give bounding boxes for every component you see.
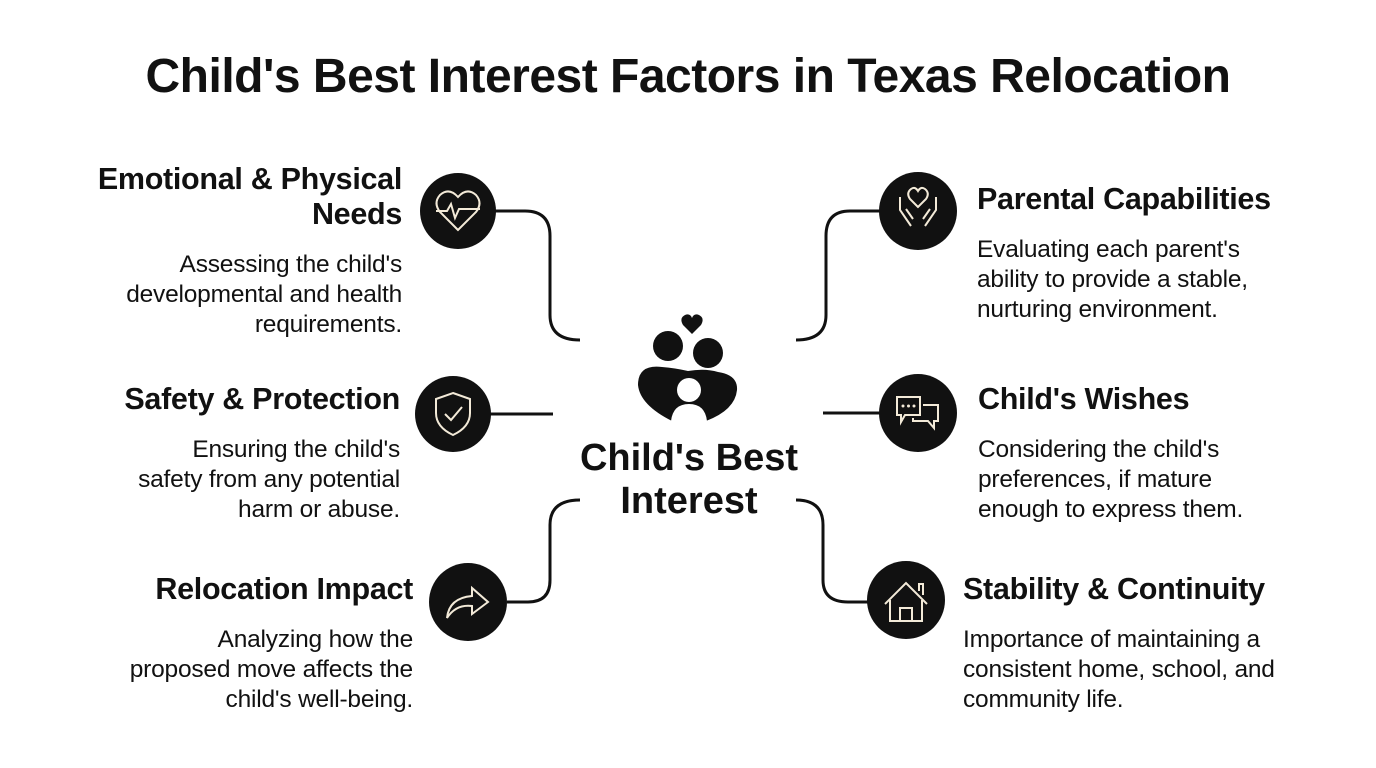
panel: emotional & physical needs: requirements. bbox=[255, 311, 402, 338]
panel: emotional & physical needs: Needs bbox=[312, 197, 402, 231]
panel: safety & protection bbox=[124, 382, 400, 523]
panel: emotional & physical needs: Assessing the child's bbox=[180, 251, 402, 278]
center label: Child's Best bbox=[580, 437, 798, 479]
panel: safety & protection: harm or abuse. bbox=[238, 496, 400, 523]
center label: Interest bbox=[620, 480, 758, 522]
panel: relocation impact: Relocation Impact bbox=[155, 572, 413, 606]
panel: child's wishes bbox=[978, 382, 1243, 523]
center label bbox=[580, 437, 798, 522]
panel: relocation impact: Analyzing how the bbox=[218, 626, 413, 653]
panel: parental capabilities bbox=[977, 182, 1271, 323]
panel: stability & continuity: Stability & Continuity bbox=[963, 572, 1265, 606]
panel: parental capabilities: Parental Capabilities bbox=[977, 182, 1271, 216]
panel: stability & continuity: consistent home, school, and bbox=[963, 656, 1275, 683]
panel: relocation impact: proposed move affects the bbox=[130, 656, 413, 683]
panel: child's wishes: preferences, if mature bbox=[978, 466, 1212, 493]
icon: chat bbox=[879, 374, 957, 452]
panel: emotional & physical needs: Emotional & Physical bbox=[98, 162, 402, 196]
panel: relocation impact bbox=[130, 572, 413, 713]
panel: stability & continuity bbox=[963, 572, 1275, 713]
panel: child's wishes: enough to express them. bbox=[978, 496, 1243, 523]
panel: parental capabilities: Evaluating each parent's bbox=[977, 236, 1240, 263]
panel: parental capabilities: nurturing environment. bbox=[977, 296, 1218, 323]
panel: child's wishes: Considering the child's bbox=[978, 436, 1219, 463]
panel: child's wishes: Child's Wishes bbox=[978, 382, 1189, 416]
panel: emotional & physical needs: developmental and health bbox=[126, 281, 402, 308]
icon: family center bbox=[638, 314, 737, 421]
panel: relocation impact: child's well-being. bbox=[226, 686, 413, 713]
panel: safety & protection: Safety & Protection bbox=[124, 382, 400, 416]
panel: safety & protection: safety from any potential bbox=[138, 466, 400, 493]
title: Child's Best Interest Factors in Texas Relocation bbox=[146, 50, 1230, 103]
icon: heart pulse bbox=[420, 173, 496, 249]
icon: shield bbox=[415, 376, 491, 452]
icon: house bbox=[867, 561, 945, 639]
icon: arrow bbox=[429, 563, 507, 641]
panel: stability & continuity: Importance of maintaining a bbox=[963, 626, 1260, 653]
panel: parental capabilities: ability to provide a stable, bbox=[977, 266, 1248, 293]
icon: hands heart bbox=[879, 172, 957, 250]
connectors bbox=[490, 211, 880, 602]
panel: emotional & physical needs bbox=[98, 162, 402, 338]
panel: stability & continuity: community life. bbox=[963, 686, 1123, 713]
panel: safety & protection: Ensuring the child's bbox=[192, 436, 400, 463]
